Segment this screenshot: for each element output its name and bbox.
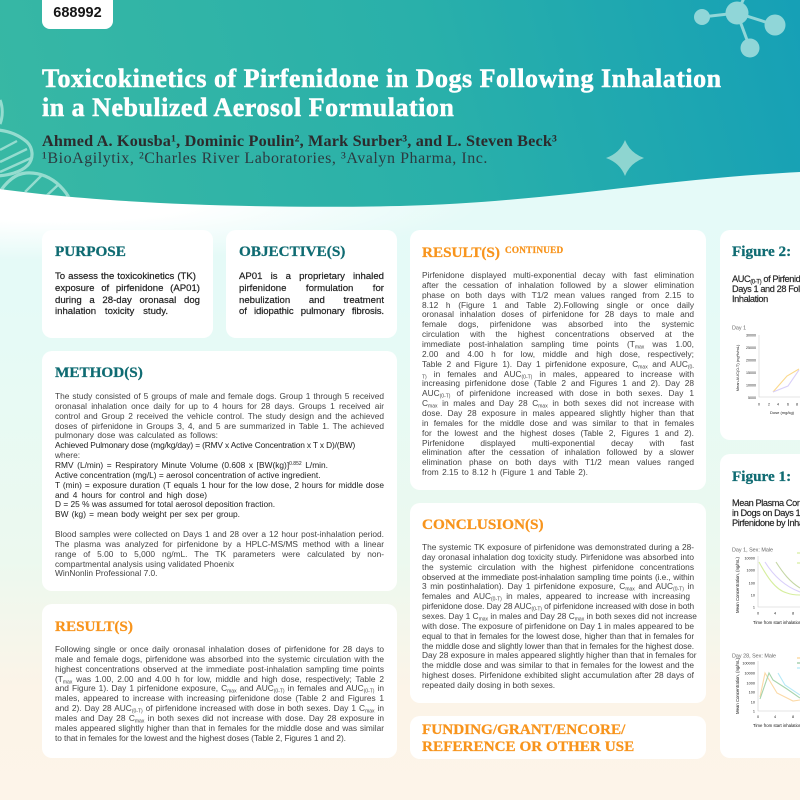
chart: day 1 male	[732, 548, 800, 625]
chart: day 28 male: 0	[757, 715, 759, 719]
panel: methods	[42, 351, 397, 591]
abstract number badge	[42, 0, 113, 29]
text: objective	[238, 271, 384, 317]
chart: day 1 male: 10000	[744, 556, 755, 560]
chart: day 1 male: 8	[792, 612, 794, 616]
chart: figure 2 day 1: 8	[796, 402, 798, 406]
text: conclusions: with dose. The exposure of pirfenidone on Day 1 in males appeared to be	[422, 621, 694, 631]
text: objective: of idiopathic pulmonary fibrosis.	[239, 306, 384, 317]
title: Toxicokinetics of Pirfenidone in Dogs Following Inhalation	[42, 64, 722, 93]
text: results continued: phase on both days with T1/2 mean values ranged from 2.15 to	[422, 290, 694, 300]
text: results continued: female dogs, pirfenidone was absorbed into the systemic	[422, 319, 694, 329]
text: results continued: increasing pirfenidone dose (Table 2 and Figures 1 and 2). Day 28	[422, 378, 694, 388]
text: methods: range of 5.00 to 5,000 ng/mL. The TK parameters were calculated by non-	[55, 549, 384, 559]
text: results: males, appeared to increase with increasing pirfenidone dose (Table 2 and Figures 1	[55, 693, 384, 703]
text: methods: Blood samples were collected on Days 1 and 28 over a 12 hour post-inhalation period.	[55, 529, 384, 539]
text: conclusions: females and AUC(0-T) in males, appeared to increase with increasing	[422, 591, 690, 603]
chart: day 1 male: Day 1, Sex: Male	[732, 548, 773, 554]
panel: results continued	[410, 230, 706, 490]
text: results: to that in females for the lowest and the highest doses (Table 2, Figures 1 and 2).	[55, 733, 346, 743]
chart: figure 2 day 1: 10000	[746, 384, 756, 388]
text: methods: D = 25 % was assumed for total aerosol deposition fraction.	[55, 499, 275, 509]
icon: molecule	[694, 0, 786, 58]
text: objective: AP01 is a proprietary inhaled	[239, 271, 384, 282]
text: conclusions: repeated daily dosing in both sexes.	[422, 680, 555, 690]
text: results continued: oronasal inhalation doses of pirfenidone for 28 days to male and	[422, 309, 694, 319]
text: results: (Tmax was 1.00, 2.00 and 4.00 h for low, middle and high dose, respectively; Table 2	[55, 674, 384, 685]
chart: figure 2 day 1: Dose (mg/kg)	[770, 410, 795, 415]
text: results continued: Pirfenidone displayed multi-exponential decay with fast	[422, 438, 694, 448]
text: purpose: To assess the toxicokinetics (TK)	[55, 271, 196, 282]
title	[42, 64, 722, 122]
text: methods	[55, 391, 384, 578]
heading: conclusions: CONCLUSION(S)	[422, 516, 544, 533]
affiliations: ¹BioAgilytix, ²Charles River Laboratories, ³Avalyn Pharma, Inc.	[42, 150, 488, 167]
text: results continued: in females for the middle dose and was similar to that in females	[422, 418, 694, 428]
text: methods: Achieved Pulmonary dose (mg/kg/day) = (RMV x Active Concentration x T x D)/(BW)	[55, 440, 355, 450]
text: methods: control and Group 2 received the vehicle control. The study design and the achieved	[55, 411, 384, 421]
text: purpose: exposure of pirfenidone (AP01)	[55, 283, 200, 294]
text: results: Following single or once daily oronasal inhalation doses of pirfenidone for 28 days to	[55, 644, 384, 654]
chart: day 28 male: 1	[753, 710, 755, 714]
panel: results continued: CONTINUED	[505, 245, 563, 255]
text: methods: The plasma was analyzed for pirfenidone by a HPLC-MS/MS method with a linear	[55, 539, 384, 549]
chart: figure 2 day 1: 4	[777, 402, 779, 406]
heading: figure 1: Figure 1:	[732, 468, 791, 485]
text: results continued: dose. Day 28 exposure in males appeared slightly higher than that	[422, 408, 694, 418]
text: methods: pulmonary dose was calculated as follows:	[55, 430, 218, 440]
heading: funding: REFERENCE OR OTHER USE	[422, 738, 634, 755]
text: conclusions: pirfenidone dose. Day 28 AUC(0-T) of pirfenidone increased with dose in both	[422, 601, 694, 613]
figure 1 caption	[732, 498, 800, 528]
text: results continued: Cmax in males and Day 28 Cmax in both sexes did not increase with	[422, 398, 694, 410]
chart: day 28 male: 10	[751, 700, 755, 704]
icon: DNA helix	[0, 100, 70, 200]
text: conclusions: day oronasal inhalation dog toxicity study. Pirfenidone was absorbed into	[422, 552, 694, 562]
text: conclusions: The systemic TK exposure of pirfenidone was demonstrated during a 28-	[422, 542, 694, 552]
text: methods: RMV (L/min) = Respiratory Minute Volume (0.608 x [BW(kg)]0.852 L/min.	[55, 460, 328, 470]
text: methods: doses of pirfenidone in Groups 3, 4, and 5 are summarized in Table 1. The achieved	[55, 421, 384, 431]
text: conclusions: the middle dose and was similar to that in females for the lowest and the	[422, 660, 694, 670]
text: results continued: AUC(0-T) of pirfenidone increased with dose in both sexes. Day 1	[422, 388, 694, 400]
chart: day 1 male: Mean Concentration, (ng/mL)	[735, 556, 740, 613]
text: results continued: Table 2 and Figure 1). Day 1 pirfenidone exposure, Cmax and AUC(0-	[422, 359, 694, 370]
heading: objective: OBJECTIVE(S)	[239, 243, 345, 260]
chart: figure 2 day 1: 2	[768, 402, 770, 406]
heading: results: RESULT(S)	[55, 618, 133, 635]
chart: day 28 male: 10000	[744, 672, 755, 676]
text: results continued: Pirfenidone displayed multi-exponential decay with fast elimination	[422, 270, 694, 280]
heading: figure 2: Figure 2:	[732, 243, 791, 260]
text: methods: compartmental analysis using validated Phoenix	[55, 559, 234, 569]
chart: day 1 male: 4	[774, 612, 776, 616]
chart: day 28 male: 100000	[742, 662, 755, 666]
text: results continued	[422, 270, 694, 477]
text: results continued: T) in females and AUC(0-T) in males, appeared to increase with	[422, 369, 694, 380]
text: objective: pirfenidone formulation for	[239, 283, 384, 294]
text: results continued: elimination after the cessation of inhalation followed by a slower	[422, 447, 694, 457]
chart: day 28 male	[732, 654, 800, 728]
icon: sparkle star	[606, 140, 644, 176]
text: results: and Figure 1). Day 1 pirfenidone exposure, Cmax and AUC(0-T) in females and AUC(0-T) in	[55, 683, 384, 695]
text: results	[55, 644, 384, 743]
text: methods: The study consisted of 5 groups of male and female dogs. Group 1 through 5 received	[55, 391, 384, 401]
panel: figure 2	[720, 230, 800, 440]
text: conclusions: Day 28 exposure in males appeared slightly higher than that in females for	[422, 650, 697, 660]
text: results: males appeared slightly higher than that in females for the middle dose and was similar	[55, 723, 384, 733]
chart: figure 2 day 1: 25000	[746, 346, 756, 350]
chart: day 28 male: 100	[749, 690, 755, 694]
title: in a Nebulized Aerosol Formulation	[42, 93, 454, 122]
text: methods: where:	[55, 450, 80, 460]
chart: figure 2 day 1: 6	[787, 402, 789, 406]
text: results continued: circulation with the highest concentrations observed at the	[422, 329, 694, 339]
panel: conclusions	[410, 503, 706, 703]
text: objective: nebulization and treatment	[239, 295, 384, 306]
chart: day 1 male: 0	[757, 612, 759, 616]
text: conclusions: highest doses. Pirfenidone exhibited slight accumulation after 28 days of	[422, 670, 694, 680]
text: results: males and Day 28 Cmax in both sexes did not increase with dose. Day 28 exposure in	[55, 713, 384, 725]
text: conclusions	[422, 542, 697, 690]
heading: funding	[422, 721, 634, 755]
panel: funding	[410, 716, 706, 759]
text: results: highest concentrations observed at the immediate post-inhalation sampling time points	[55, 664, 384, 674]
panel: figure 1	[720, 454, 800, 758]
abstract number badge: 688992	[53, 5, 102, 21]
text: results: and 2). Day 28 AUC(0-T) of pirfenidone increased with dose in both sexes. Day 1 Cmax in	[55, 703, 384, 715]
text: methods: oronasal inhalation once daily for up to 4 hours for 28 days. Groups 1 received air	[55, 401, 384, 411]
text: results continued: elimination phase on both days with T1/2 mean values ranged	[422, 457, 694, 467]
chart: figure 2 day 1: 15000	[746, 371, 756, 375]
chart: day 28 male: 8	[792, 715, 794, 719]
text: conclusions: the systemic circulation with the highest pirfenidone concentrations	[422, 562, 694, 572]
panel: purpose	[42, 230, 213, 338]
text: conclusions: equal to that in females for the lowest dose, higher than that in females for	[422, 631, 694, 641]
text: methods: Active concentration (mg/L) = aerosol concentration of active ingredient.	[55, 470, 321, 480]
chart: figure 2 day 1: Day 1	[732, 326, 746, 332]
heading: methods: METHOD(S)	[55, 364, 143, 381]
header banner	[0, 0, 800, 207]
chart: day 1 male: 10	[751, 594, 755, 598]
chart: day 28 male: Mean Concentration, (ng/mL)	[735, 657, 740, 714]
panel: results	[42, 604, 397, 758]
text: results continued: 2.00 and 4.00 h for low, middle and high dose, respectively;	[422, 349, 694, 359]
heading: purpose: PURPOSE	[55, 243, 126, 260]
heading: results continued	[422, 244, 563, 261]
figure 2 caption	[732, 274, 800, 304]
heading: results continued: RESULT(S)	[422, 244, 500, 261]
text: results continued: from 2.15 to 8.12 h (Figure 1 and Table 2).	[422, 467, 588, 477]
chart: figure 2 day 1: 5000	[748, 396, 756, 400]
chart: day 1 male: 1000	[747, 568, 755, 572]
panel: objective	[226, 230, 397, 338]
chart: day 1 male: 100	[749, 582, 755, 586]
figure 2 caption: Inhalation	[732, 294, 768, 304]
text: results: male and female dogs, pirfenidone was absorbed into the systemic circulation with the	[55, 654, 384, 664]
chart: figure 2 day 1: 20000	[746, 358, 756, 362]
text: conclusions: observed at the immediate post-inhalation sampling time points (i.e., within	[422, 572, 694, 582]
text: results continued: after the cessation of inhalation followed by a slower elimination	[422, 280, 694, 290]
text: results continued: for the lowest and the highest doses (Table 2, Figures 1 and 2).	[422, 428, 694, 438]
authors: Ahmed A. Kousba¹, Dominic Poulin², Mark Surber³, and L. Steven Beck³	[42, 132, 557, 150]
chart: day 28 male: 1000	[747, 682, 755, 686]
text: results continued: 8.12 h (Figure 1 and Table 2).Following single or once daily	[422, 300, 694, 310]
text: methods: and 4 hours for control and high dose)	[55, 490, 207, 500]
chart: day 1 male: 1	[753, 606, 755, 610]
heading: funding: FUNDING/GRANT/ENCORE/	[422, 721, 625, 738]
text: methods: BW (kg) = mean body weight per sex per group.	[55, 509, 240, 519]
text: purpose	[55, 271, 200, 317]
chart: figure 2 day 1: Mean AUC(0-T) (ng*h/mL)	[735, 344, 740, 391]
text: methods: T (min) = exposure duration (T equals 1 hour for the low dose, 2 hours for middle dose	[55, 480, 384, 490]
text: conclusions: 3 min postinhalation). Day 1 pirfenidone exposure, Cmax and AUC(0-T) in	[422, 581, 694, 593]
text: conclusions: the middle dose and slightly lower than that in females for the highest dose.	[422, 641, 694, 651]
text: results continued: immediate post-inhalation sampling time points (Tmax was 1.00,	[422, 339, 694, 351]
text: purpose: inhalation toxicity study.	[55, 306, 168, 317]
text: purpose: during a 28-day oronasal dog	[55, 295, 200, 306]
chart: figure 2 day 1: 0	[758, 402, 760, 406]
chart: figure 2 day 1	[732, 326, 800, 415]
chart: figure 2 day 1: 30000	[746, 334, 756, 338]
text: conclusions: sexes. Day 1 Cmax in males and Day 28 Cmax in both sexes did not increase	[422, 611, 697, 623]
chart: day 28 male: 4	[774, 715, 776, 719]
text: methods: WinNonlin Professional 7.0.	[55, 568, 158, 578]
chart: day 28 male: Day 28, Sex: Male	[732, 654, 776, 660]
